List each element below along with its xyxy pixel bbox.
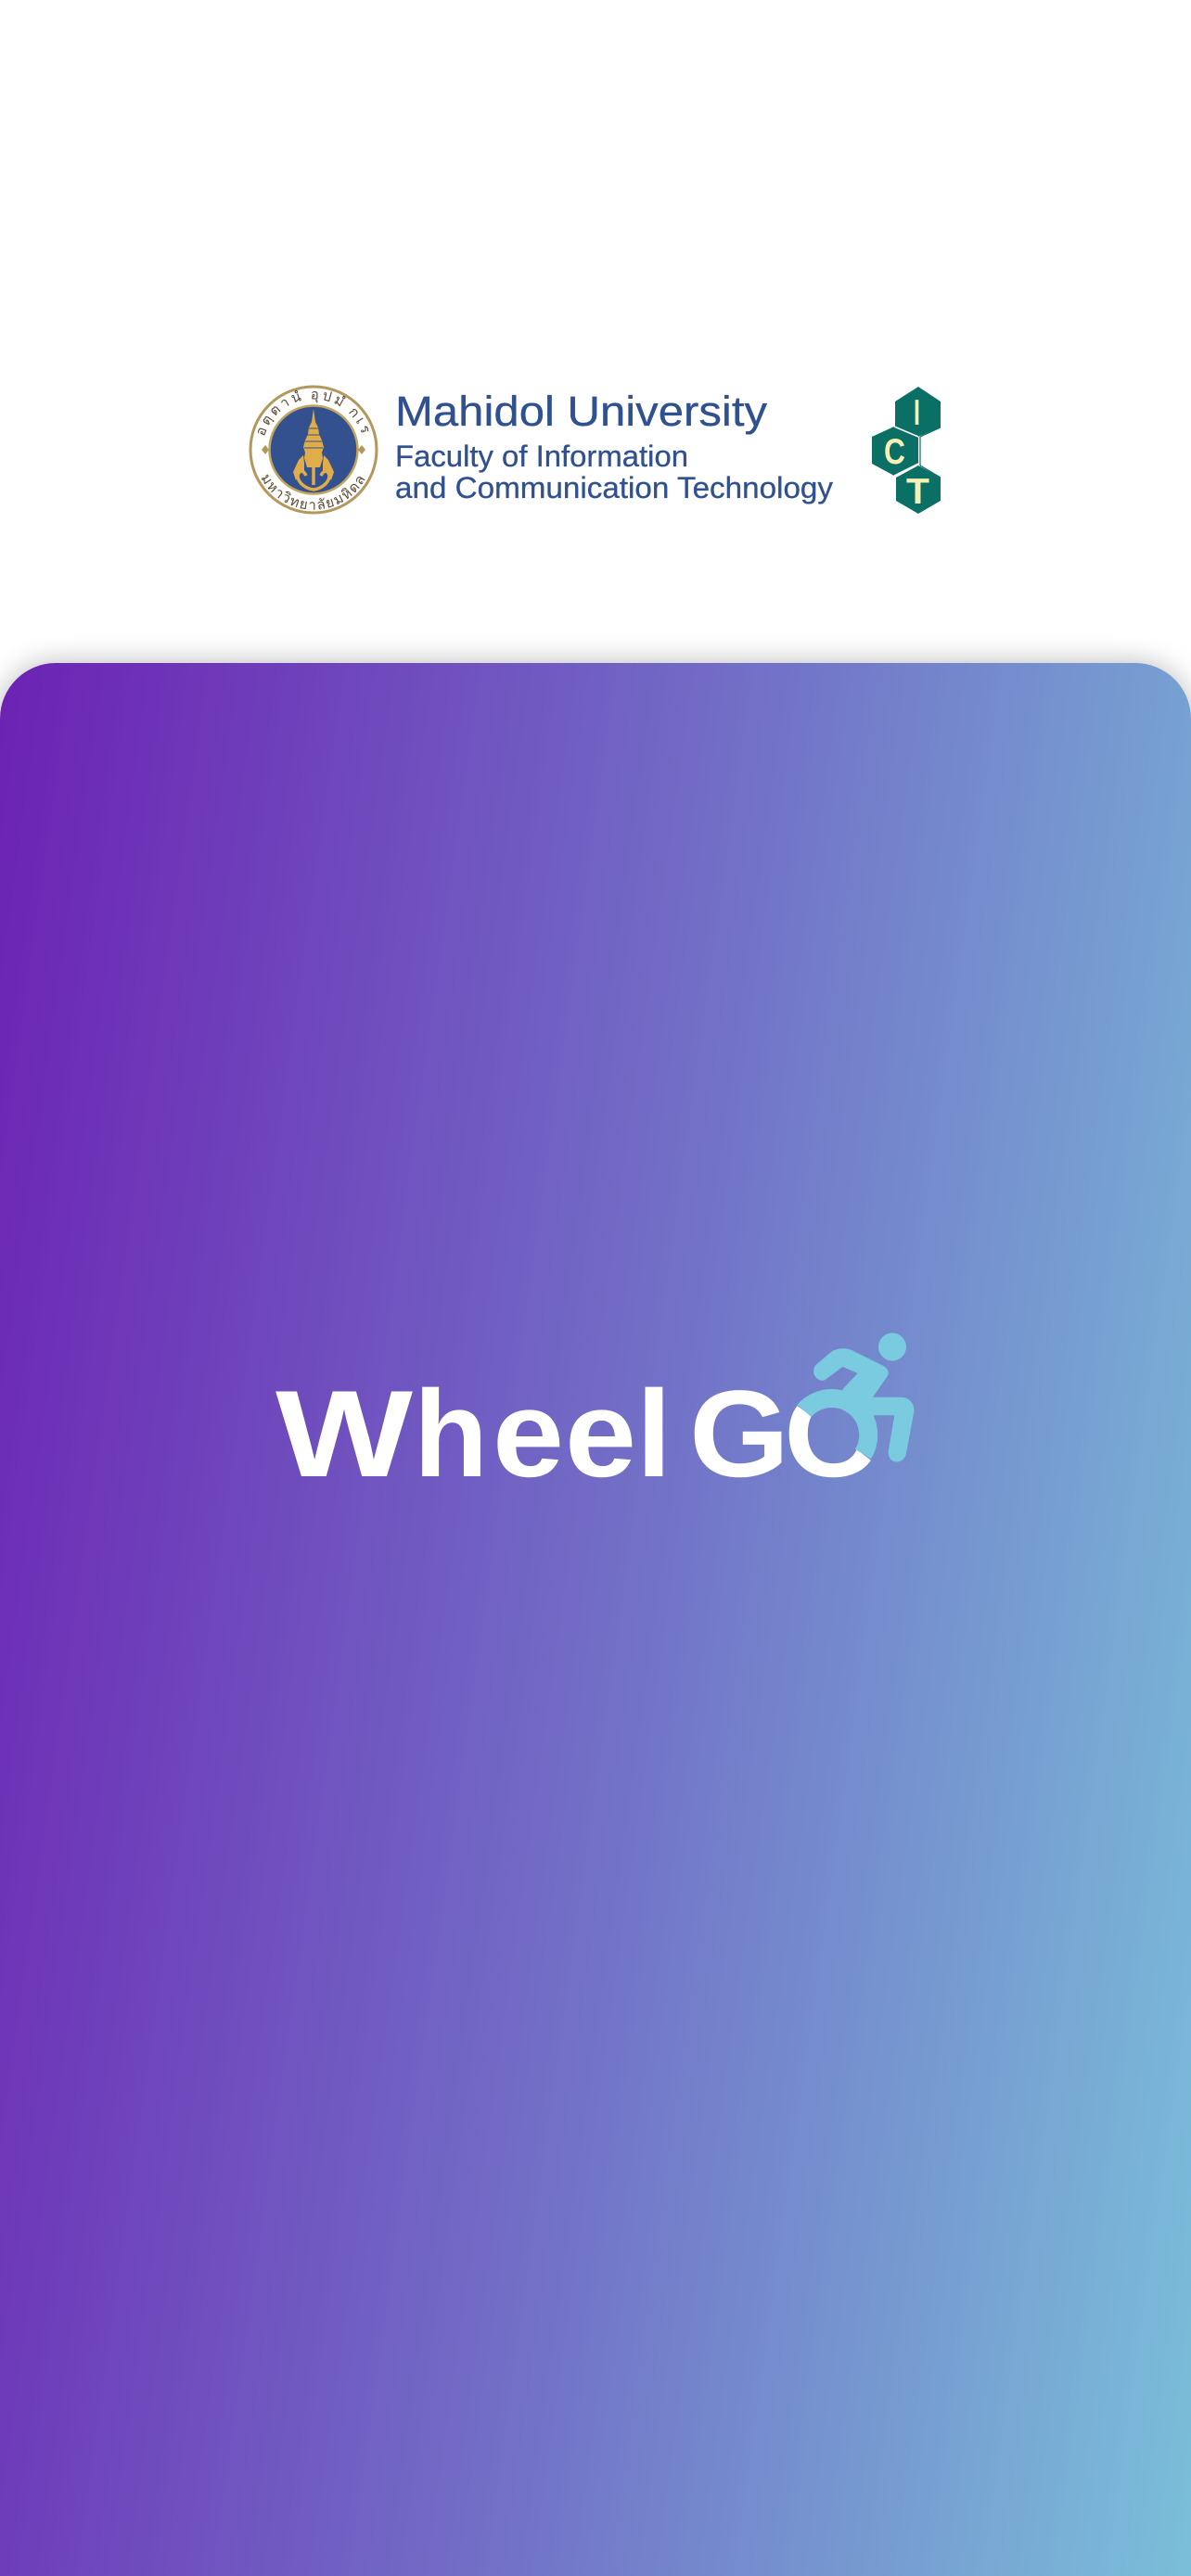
logo: ICT hexagons (872, 387, 941, 514)
text: Wheel (275, 1366, 789, 1503)
logo: Mahidol University seal: มหาวิทยาลัยมหิดล (262, 475, 365, 510)
heading: Mahidol University and faculty name: and Communication Technology (395, 471, 833, 504)
heading: Mahidol University and faculty name (395, 388, 833, 504)
logo: Mahidol University seal (249, 386, 378, 514)
logo: ICT hexagons: I (914, 393, 920, 433)
logo: ICT hexagons: T (906, 472, 929, 512)
panel: gradient splash background (0, 663, 1191, 2576)
heading: Mahidol University and faculty name: Mahidol University (395, 388, 768, 435)
logo: ICT hexagons: C (884, 432, 905, 472)
logo: Wheel GO wordmark with wheelchair icon (275, 1333, 915, 1493)
logo: Mahidol University seal: อตฺตานํ อุปมํ กเร (258, 389, 369, 436)
heading: Mahidol University and faculty name: Faculty of Information (395, 440, 688, 473)
icon: wheelchair user (804, 1333, 915, 1462)
